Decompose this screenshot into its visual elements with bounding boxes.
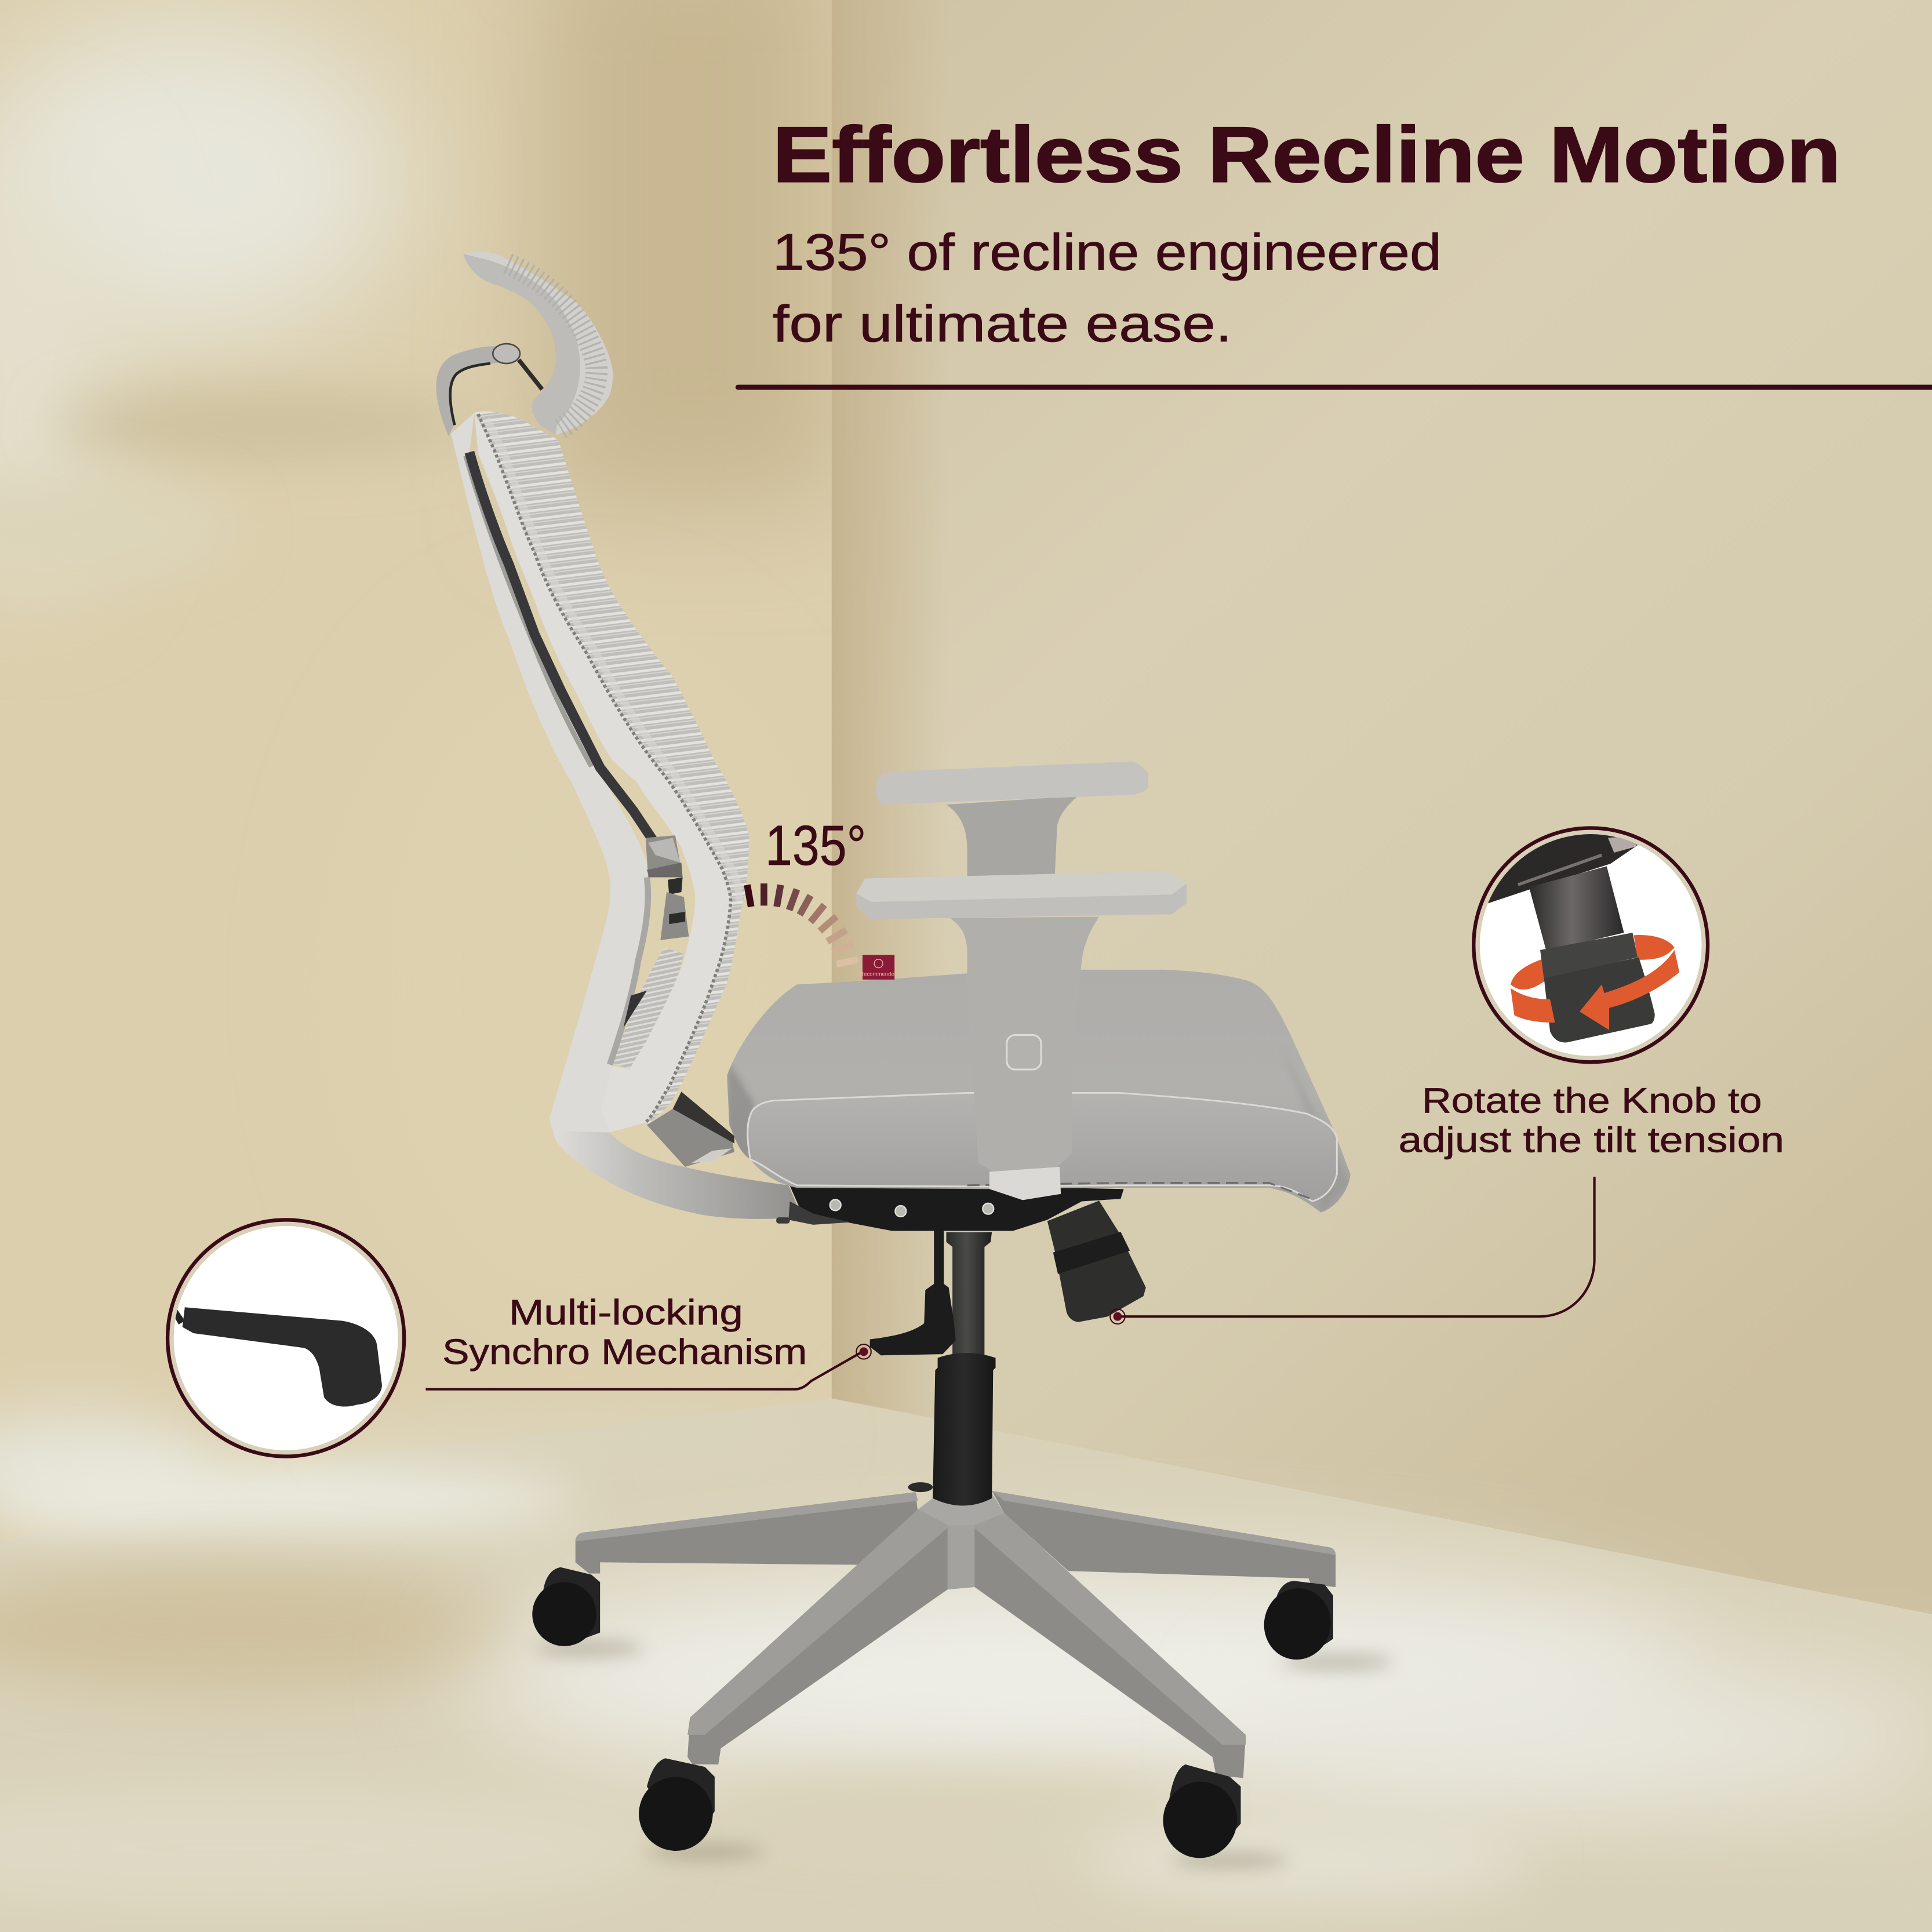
label: tilt tension	[1399, 1080, 1784, 1160]
casters	[525, 1567, 1337, 1865]
mechanism plate	[776, 1183, 1124, 1231]
tension knob	[1047, 1200, 1146, 1322]
knob body	[1529, 866, 1624, 951]
headrest	[463, 252, 613, 435]
far armrest	[876, 762, 1148, 877]
gas lift	[933, 1232, 996, 1506]
seat cushion	[727, 970, 1351, 1213]
orange arrow back	[1634, 935, 1675, 960]
subtitle: 135° of recline engineered	[773, 223, 1442, 281]
chair	[436, 252, 1393, 1868]
back mesh	[474, 412, 749, 1125]
subtitle: for ultimate ease.	[773, 294, 1232, 352]
headrest bracket	[436, 344, 542, 436]
title: Effortless Recline Motion	[773, 111, 1841, 199]
rear back frame	[451, 413, 802, 1219]
near armrest	[856, 871, 1187, 1200]
callout: tilt tension circle	[1473, 828, 1708, 1062]
brand tag	[860, 955, 897, 980]
brand tag: Recommended	[860, 972, 897, 978]
recline angle label: 135°	[765, 813, 866, 877]
back rail	[470, 452, 653, 841]
recline mechanism bracket	[646, 835, 689, 940]
label: synchro mechanism: Multi-locking	[509, 1293, 743, 1333]
arm adjustment button	[1007, 1035, 1041, 1069]
label: tilt tension: adjust the tilt tension	[1399, 1120, 1784, 1160]
front back frame	[474, 413, 731, 1132]
callout: lever circle	[168, 1220, 404, 1457]
header divider	[738, 386, 1932, 388]
recline angle arc	[747, 883, 858, 964]
leader line: synchro mechanism	[425, 1344, 871, 1389]
label: synchro mechanism: Synchro Mechanism	[442, 1332, 807, 1372]
leader line: tilt tension	[1110, 1177, 1595, 1324]
lever handle	[870, 1231, 955, 1355]
caster shadows	[535, 1641, 1393, 1868]
label: synchro mechanism	[442, 1293, 807, 1372]
subtitle	[773, 223, 1442, 352]
star base	[576, 1482, 1336, 1778]
lumbar shadow wedge	[624, 991, 647, 1028]
orange arrow front	[1580, 950, 1679, 1030]
lower strut and plate	[647, 1091, 734, 1167]
label: tilt tension: Rotate the Knob to	[1422, 1080, 1762, 1120]
inner lumbar mesh	[614, 948, 684, 1069]
